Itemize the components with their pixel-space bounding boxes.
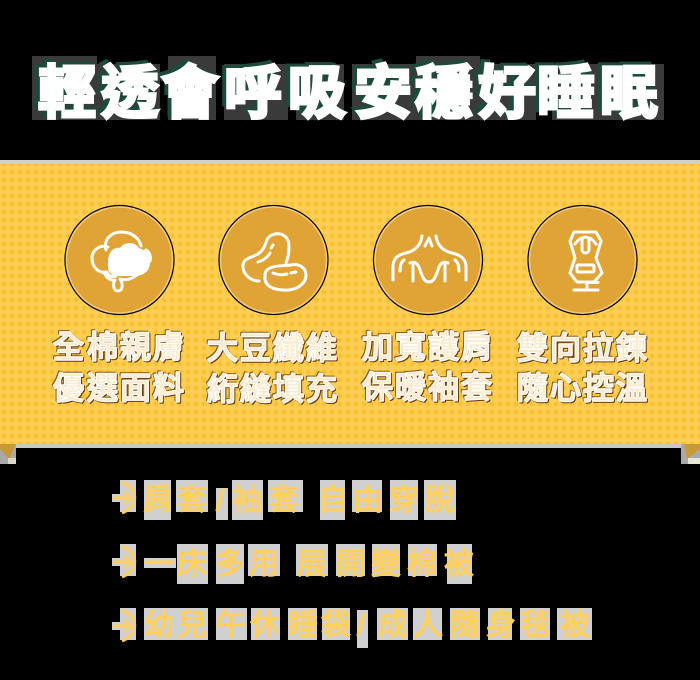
benefit text: 一床多用展開變棉被: [144, 548, 474, 581]
panel yellow dotted background: [0, 164, 700, 444]
icon: soybeans: [243, 234, 306, 290]
label: zipper: [517, 331, 647, 406]
feature: zipper: [528, 206, 637, 314]
arrow bullet: [113, 546, 135, 577]
panel fold: left: [0, 444, 16, 464]
label: cotton: [53, 330, 184, 406]
label: soybean: [207, 331, 337, 407]
feature: cotton: [65, 206, 174, 314]
label: shoulder: [362, 330, 492, 405]
label: shoulder: 保暖袖套: [362, 370, 492, 405]
label: shoulder: 加寬護肩: [362, 330, 492, 365]
backing blocks row 3: [112, 608, 592, 648]
benefit text: 幼兒午休睡袋/成人隨身毯被: [144, 609, 590, 642]
benefit: shoulder and sleeve covers: [112, 480, 456, 520]
icon circle: [65, 206, 174, 314]
icon circle: [219, 206, 328, 314]
benefit text: 肩套/袖套自由穿脫: [143, 484, 455, 517]
label: soybean: 大豆纖維: [207, 331, 337, 366]
benefits list: [112, 480, 592, 648]
benefit: multi-use: [112, 544, 474, 584]
label: cotton: 優選面料: [53, 371, 184, 406]
icon: shoulders: [393, 236, 466, 282]
title text: 輕透會呼吸安穩好睡眠: [38, 61, 658, 126]
title backing blocks: [32, 56, 664, 120]
title: [32, 56, 664, 126]
icon circle: [528, 206, 637, 314]
feature: shoulder guard: [374, 206, 482, 314]
label: zipper: 隨心控溫: [517, 371, 647, 406]
backing blocks row 2: [112, 544, 472, 584]
label: zipper: 雙向拉鍊: [517, 331, 647, 366]
benefit: nap sack and blanket: [112, 608, 592, 648]
label: cotton: 全棉親膚: [53, 330, 184, 365]
panel: features: [0, 160, 700, 464]
arrow bullet: [113, 482, 135, 513]
panel bottom edge: [16, 444, 681, 448]
panel fold: right: [681, 444, 700, 464]
backing blocks row 1: [112, 480, 456, 520]
feature labels: [53, 330, 647, 407]
icon: cotton boll: [92, 232, 150, 291]
feature: soybean: [219, 206, 328, 314]
label: soybean: 絎縫填充: [207, 372, 337, 407]
arrow bullet: [113, 610, 135, 641]
panel top edge: [0, 160, 700, 164]
icon circle: [374, 206, 482, 314]
icon: zipper pull: [570, 232, 602, 290]
